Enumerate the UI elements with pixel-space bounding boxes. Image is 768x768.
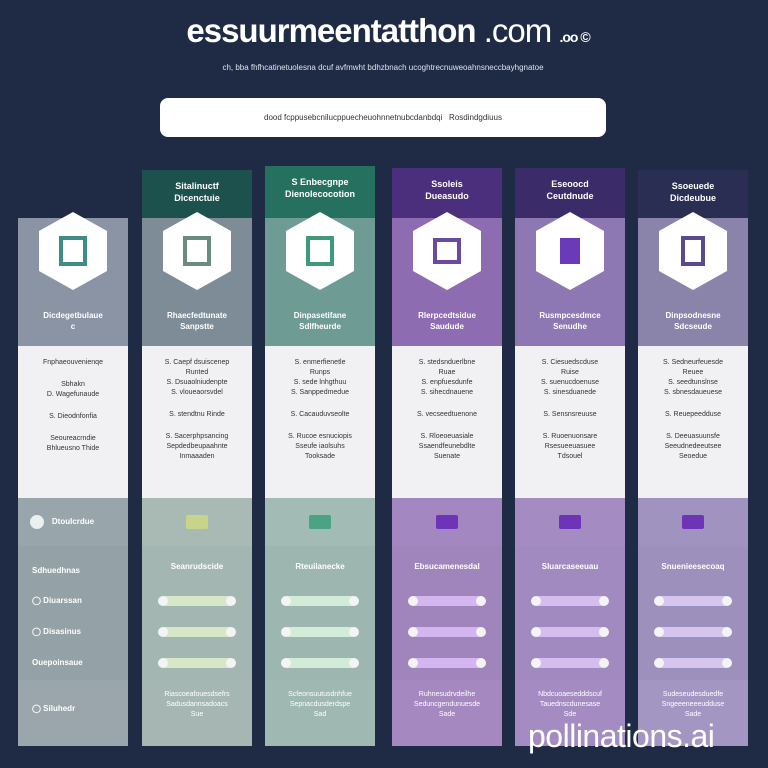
col4 top: Saudude — [430, 322, 464, 331]
col5 header: Eseoocd — [551, 179, 589, 189]
column 5: Rsesueeuasuee — [545, 443, 595, 450]
column 4: Ruhnesudrvdeilhe — [419, 691, 475, 698]
col1 list: Bhlueusno Thide — [47, 445, 99, 452]
col5 top: Rusmpcesdmce — [539, 311, 601, 320]
col3 top: Dinpasetifane — [294, 311, 346, 320]
column 5: S. Ruoenuonsare — [543, 433, 597, 440]
search bar: dood fcppusebcnilucppuecheuohnnetnubcdanbdqi Rosdindgdiuus — [264, 113, 502, 122]
column 5: Nbdcuoaesedddscuf — [538, 691, 602, 698]
column 4: Sade — [439, 711, 455, 718]
col2 header: Sitalinuctf — [175, 181, 219, 191]
column 2: Seanrudscide — [171, 562, 223, 571]
col5 top: Senudhe — [553, 322, 587, 331]
column 3: Sseufe iaolsuhs — [295, 443, 345, 450]
column 3: S. enmerfienetle — [294, 359, 345, 366]
column 2: Runted — [186, 369, 208, 376]
icon: hex 1 — [39, 212, 107, 290]
column 6: Snuenieesecoaq — [661, 562, 725, 571]
col1 top — [18, 218, 128, 346]
col2 top: Sanpstte — [180, 322, 214, 331]
column 5 — [515, 168, 625, 746]
column 5: Tdsouel — [558, 453, 582, 460]
column 1: Dtoulcrdue — [52, 517, 94, 526]
column 4: S. vecseedtuenone — [417, 411, 477, 418]
column 4: Suenate — [434, 453, 460, 460]
column 5: Ruise — [561, 369, 579, 376]
column 5: Sluarcaseeuau — [542, 562, 598, 571]
column 2: Sadusdannsadoacs — [166, 701, 228, 708]
col6 header — [638, 170, 748, 218]
column 1: ◯ Siluhedr — [32, 704, 75, 713]
col5 header — [515, 168, 625, 218]
column 3: S. Rucoe esnuciopis — [288, 433, 352, 440]
column 4: Ebsucamenesdal — [414, 562, 480, 571]
column 2: S. Dsuaolniudenpte — [166, 379, 228, 386]
column 5: Tauednscdunesase — [540, 701, 600, 708]
column 5: S. sinesduanede — [544, 389, 596, 396]
column 2: S. Caepf dsuiscenep — [165, 359, 229, 366]
column 4: Ssaendfeunebdlte — [419, 443, 475, 450]
column 6: Sade — [685, 711, 701, 718]
column 5: S. suenucdoenuse — [541, 379, 599, 386]
column 6 — [638, 170, 748, 746]
column 4: S. sihecdnauene — [421, 389, 473, 396]
column 3: S. sede lnhgthuu — [294, 379, 346, 386]
col6 top — [638, 218, 748, 346]
col5 header: Ceutdnude — [546, 191, 594, 201]
column 2: Sue — [191, 711, 203, 718]
column 6: Sngeeeneeeudduse — [662, 701, 724, 708]
col2 header — [142, 170, 252, 218]
column 1: ◯ Disasinus — [32, 627, 81, 636]
col2 top: Rhaecfedtunate — [167, 311, 227, 320]
column 2: Inmaaaden — [179, 453, 215, 460]
column 6: Sudeseudesduedfe — [663, 691, 723, 698]
col6 top: Dinpsodnesne — [665, 311, 721, 320]
column 3 — [265, 166, 375, 746]
col4 header: Dueasudo — [425, 191, 469, 201]
column 6: S. Sedneurfeuesde — [663, 359, 723, 366]
col2 top — [142, 218, 252, 346]
col1 top: c — [71, 322, 75, 331]
column 3: Rteuilanecke — [295, 562, 345, 571]
column 5: Sde — [564, 711, 576, 718]
column 4: Seduncgendunuesde — [414, 701, 480, 708]
column 4: S. enpfuesdunfe — [422, 379, 472, 386]
col5 top — [515, 218, 625, 346]
column 5: S. Sensnsreuuse — [543, 411, 597, 418]
col1 list: D. Wagefunaude — [47, 391, 99, 398]
column 1: ◯ Diuarssan — [32, 596, 82, 605]
column 6: Seeudnedeeutsee — [665, 443, 721, 450]
col4 header — [392, 168, 502, 218]
column 3: S. Cacauduvseolte — [291, 411, 349, 418]
column 1: Ouepoinsaue — [32, 658, 83, 667]
column 4: S. stedsnduerlbne — [419, 359, 475, 366]
col1 list: S. Dieodnfonfia — [49, 413, 97, 420]
col3 top: Sdlfheurde — [299, 322, 341, 331]
col3 top — [265, 218, 375, 346]
column 2: Sepdedbeupaahnte — [166, 443, 228, 450]
column 4 — [392, 168, 502, 746]
col3 header: Dienolecocotion — [285, 189, 355, 199]
col1 list: Fnphaeouvenienqe — [43, 359, 103, 366]
col1 list — [18, 346, 128, 498]
col6 top: Sdcseude — [674, 322, 712, 331]
column 2 — [142, 170, 252, 746]
column 1 — [18, 212, 128, 746]
column 3: Tooksade — [305, 453, 335, 460]
subtitle: ch, bba fhfhcatinetuolesna dcuf avfmwht bdhzbnach ucoghtrecnuweoahnsneccbayhgnatoe — [222, 63, 544, 72]
column 6: S. Deeuasuunsfe — [666, 433, 720, 440]
col3 header — [265, 166, 375, 218]
col6 header: Dicdeubue — [670, 193, 716, 203]
column 2: S. Sacerphpsancing — [166, 433, 228, 440]
column 2: Riascoeafouesdsefrs — [164, 691, 230, 698]
column 3: Sad — [314, 711, 326, 718]
col6 header: Ssoeuede — [672, 181, 714, 191]
col3 header: S Enbecgnpe — [291, 177, 348, 187]
column 2: S. stendtnu Rinde — [169, 411, 225, 418]
column 3: Scfeonsuutusdnhfue — [288, 691, 352, 698]
column 5: S. Ciesuedscduse — [542, 359, 598, 366]
col4 top — [392, 218, 502, 346]
title: essuurmeentatthon .com .oo © — [186, 12, 590, 49]
column 6: Seoedue — [679, 453, 707, 460]
column 4: Ruae — [439, 369, 455, 376]
column 3: Sepnacdusderdspe — [290, 701, 350, 708]
col1 top: Dicdegetbulaue — [43, 311, 103, 320]
column 6: S. Reuepeedduse — [665, 411, 721, 418]
column 6: Reuee — [683, 369, 703, 376]
col4 top: Rlerpcedtsidue — [418, 311, 476, 320]
column 3: S. Sanppedmedue — [291, 389, 349, 396]
search bar — [160, 98, 606, 137]
watermark: pollinations.ai — [528, 718, 714, 754]
col4 header: Ssoleis — [431, 179, 463, 189]
column 2: S. vloueaorsvdel — [171, 389, 223, 396]
column 6: S. sbnesdaueuese — [664, 389, 722, 396]
col1 list: Seoureacrndie — [50, 435, 96, 442]
column 3: Runps — [310, 369, 330, 376]
column 6: S. seedtunslnse — [668, 379, 718, 386]
col1 list: Sbhakn — [61, 381, 85, 388]
column 1: Sdhuedhnas — [32, 566, 80, 575]
col2 header: Dicenctuie — [174, 193, 220, 203]
column 4: S. Rloeoeuasiale — [421, 433, 473, 440]
